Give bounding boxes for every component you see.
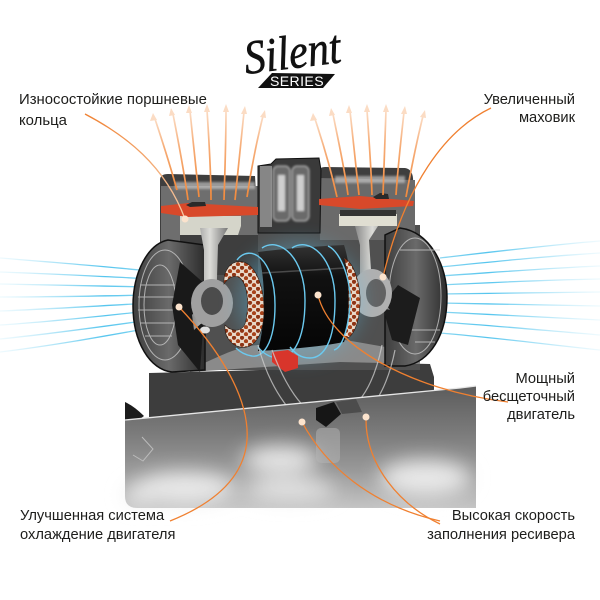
logo: Silent Series [241, 20, 345, 89]
tank body [125, 386, 476, 508]
right red plate [319, 196, 414, 209]
right copper coil [344, 258, 360, 338]
pipe stub [316, 428, 340, 463]
right crank [352, 269, 392, 317]
label: motor: Мощный [515, 371, 575, 387]
right flywheel [385, 228, 447, 366]
label: receiver: Высокая скорость [452, 508, 575, 524]
label: flywheel: Увеличенный [484, 92, 575, 108]
tank side outlines [133, 437, 153, 461]
left cylinder head [160, 174, 258, 275]
motor black cylinder [258, 245, 351, 351]
blue motor rings [236, 245, 350, 358]
tank top edge [125, 386, 476, 420]
leader: cooling [170, 304, 247, 521]
black check valve [316, 402, 341, 427]
left flywheel [133, 240, 205, 372]
left fan black blades [172, 262, 206, 372]
label: piston rings: кольца [19, 113, 68, 129]
label: motor [483, 371, 575, 423]
leader: flywheel [380, 108, 491, 280]
label: cooling: охлаждение двигателя [20, 527, 175, 543]
left crank [191, 279, 233, 334]
left red plate [161, 203, 258, 217]
right cylinder head [320, 167, 415, 240]
right cylinder glass [319, 178, 415, 240]
left copper coil [224, 262, 264, 347]
right flywheel fins [389, 238, 441, 354]
label: flywheel: маховик [519, 110, 576, 126]
left flywheel fins [138, 250, 191, 360]
airflow: blue cooling lines left [0, 258, 150, 352]
label: piston rings: Износостойкие поршневые [19, 92, 207, 108]
right fins [335, 176, 405, 183]
base plate [149, 362, 434, 420]
leader: receiver right [362, 414, 440, 524]
label: receiver [427, 508, 576, 543]
lower translucent housing [190, 340, 420, 372]
right plate valve [373, 193, 389, 199]
left cylinder glass [161, 186, 258, 246]
leader: receiver left [298, 418, 440, 521]
right piston crown [339, 214, 397, 226]
label: motor: двигатель [507, 407, 575, 423]
motor glow [238, 242, 362, 358]
logo series word: SERIES [270, 73, 324, 89]
central block [185, 225, 420, 370]
airflow: orange heat arrow heads left [150, 104, 266, 121]
red connector block [272, 350, 298, 372]
leader: motor [314, 292, 508, 402]
label: flywheel [484, 92, 576, 126]
tank left end cap [125, 402, 144, 430]
motor highlight [262, 268, 345, 273]
logo badge [258, 73, 335, 88]
label: motor: бесщеточный [483, 389, 575, 405]
left connecting rod [192, 228, 228, 330]
right piston dark [340, 210, 396, 216]
left plate valve [186, 202, 206, 207]
right fan black blades [382, 285, 420, 345]
compressor assembly [133, 158, 447, 430]
label: receiver: заполнения ресивера [427, 527, 576, 543]
airflow: orange heat arrow heads right [310, 104, 426, 121]
label: piston rings [19, 92, 207, 129]
left piston crown [180, 216, 241, 235]
leader: piston rings [85, 114, 188, 222]
label: cooling [20, 508, 175, 543]
airflow: orange heat arrows right [315, 110, 423, 197]
valve housing panel [260, 166, 272, 227]
logo script word: Silent [241, 20, 345, 85]
valve second piece [336, 399, 362, 414]
left fins [175, 182, 255, 189]
central valve housing [258, 158, 321, 233]
transparent air pipe [258, 345, 395, 430]
white vapour [124, 446, 471, 505]
label: cooling: Улучшенная система [20, 508, 165, 524]
receiver tank [124, 386, 476, 508]
airflow: orange heat arrows left [155, 110, 263, 200]
right connecting rod [355, 226, 390, 310]
airflow: blue cooling lines right [440, 241, 600, 350]
valve cylinders [273, 166, 309, 221]
